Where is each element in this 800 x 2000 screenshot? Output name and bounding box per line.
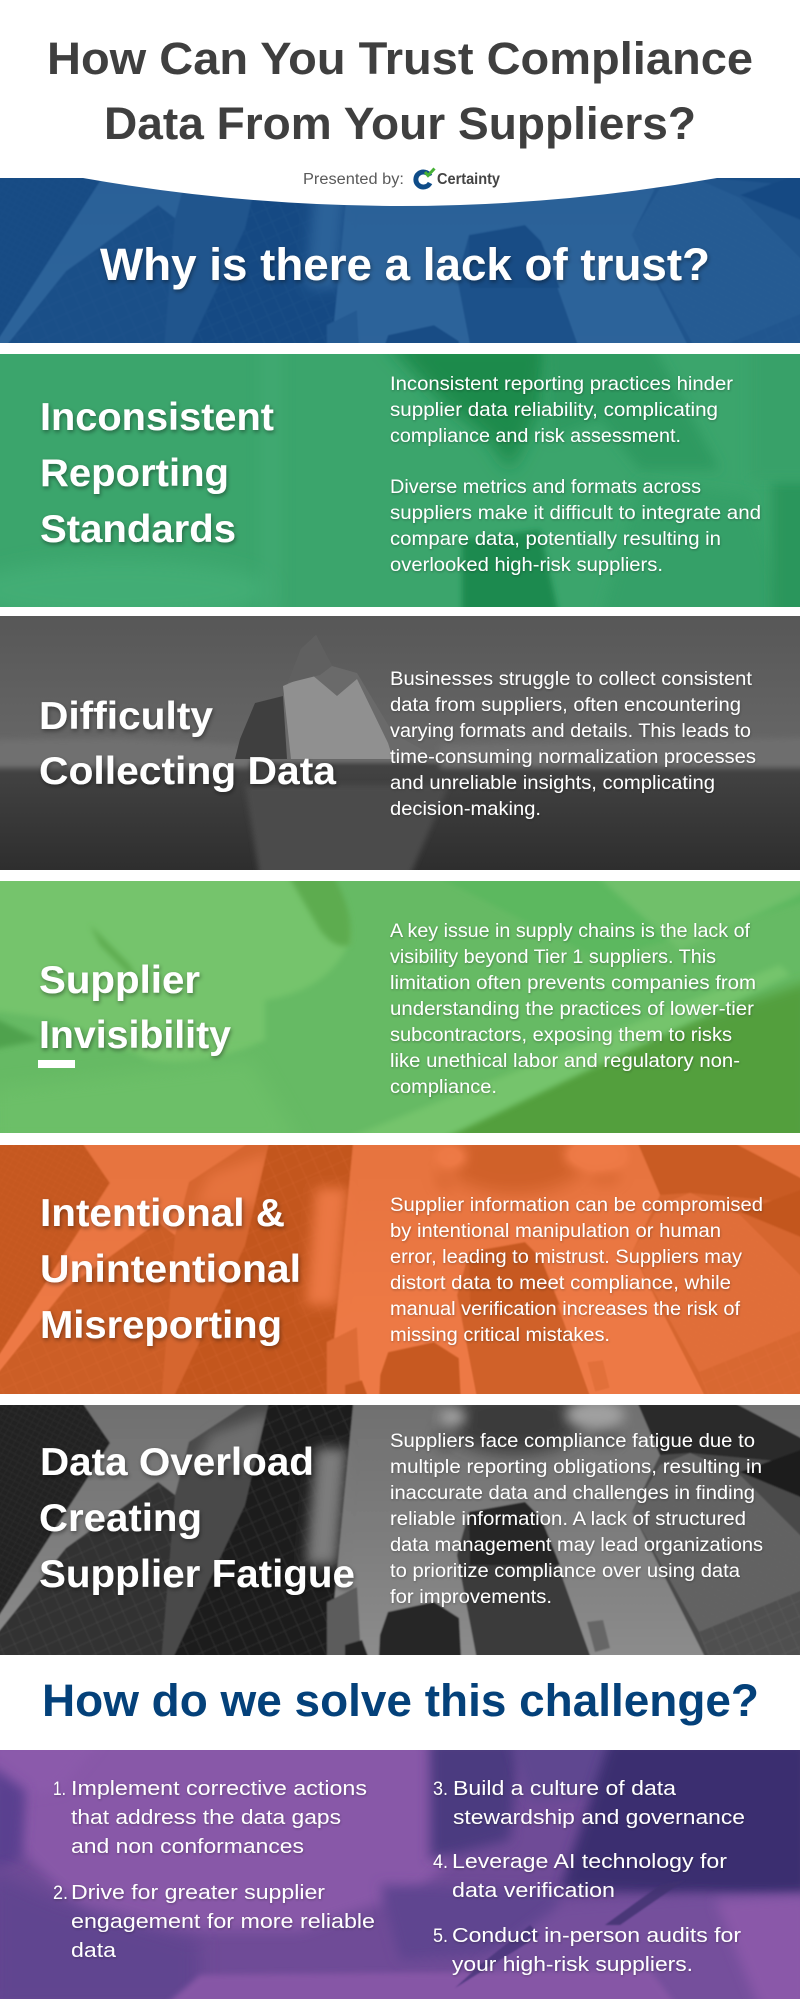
body text: compare data, potentially resulting in bbox=[390, 528, 721, 550]
list column 2: Leverage AI technology for bbox=[452, 1851, 727, 1873]
body text: A key issue in supply chains is the lack of bbox=[390, 920, 751, 942]
heading: Inconsistent bbox=[40, 396, 274, 439]
list column 2: 3. bbox=[433, 1779, 448, 1800]
grey skyscraper background bbox=[0, 1405, 800, 1655]
body text bbox=[390, 373, 761, 576]
list column 1: 2. bbox=[53, 1883, 68, 1904]
list column 1 bbox=[53, 1778, 375, 1962]
handshake photo background bbox=[0, 870, 800, 1145]
panel: solutions bbox=[0, 1740, 800, 2000]
heading bbox=[40, 1192, 301, 1347]
body text: visibility beyond Tier 1 suppliers. This bbox=[390, 946, 716, 968]
iceberg photo background bbox=[0, 616, 800, 880]
heading: Reporting bbox=[40, 452, 229, 495]
title bbox=[47, 33, 753, 149]
green photo background bbox=[0, 340, 800, 620]
body text bbox=[390, 920, 756, 1098]
body text: Diverse metrics and formats across bbox=[390, 476, 701, 498]
body text: for improvements. bbox=[390, 1586, 552, 1608]
presented by: Certainty bbox=[437, 171, 500, 188]
white accent bar bbox=[38, 1060, 75, 1068]
white curved header edge bbox=[83, 178, 717, 206]
list column 1: data bbox=[71, 1940, 117, 1962]
heading: Intentional & bbox=[40, 1192, 285, 1235]
body text: time-consuming normalization processes bbox=[390, 746, 756, 768]
heading: Supplier bbox=[39, 959, 200, 1002]
heading: Invisibility bbox=[39, 1014, 231, 1057]
body text: data from suppliers, often encountering bbox=[390, 694, 741, 716]
panel: intentional and unintentional misreporting bbox=[0, 1145, 800, 1394]
body text: Inconsistent reporting practices hinder bbox=[390, 373, 734, 395]
list column 2: your high-risk suppliers. bbox=[452, 1954, 693, 1976]
body text: distort data to meet compliance, while bbox=[390, 1272, 731, 1294]
body text: inaccurate data and challenges in finding bbox=[390, 1482, 755, 1504]
heading: how do we solve this challenge: How do we solve this challenge? bbox=[42, 1675, 759, 1726]
purple photo background bbox=[0, 1740, 800, 2000]
list column 2: 4. bbox=[433, 1852, 448, 1873]
panel: why is there a lack of trust bbox=[0, 178, 800, 343]
icon: certainty logo bbox=[416, 168, 434, 187]
heading: Unintentional bbox=[40, 1248, 301, 1291]
body text: like unethical labor and regulatory non- bbox=[390, 1050, 740, 1072]
body text: understanding the practices of lower-tier bbox=[390, 998, 755, 1020]
heading: Standards bbox=[40, 508, 236, 551]
body text: supplier data reliability, complicating bbox=[390, 399, 718, 421]
body text: and unreliable insights, complicating bbox=[390, 772, 715, 794]
heading bbox=[39, 959, 231, 1057]
heading bbox=[40, 396, 274, 551]
body text: varying formats and details. This leads to bbox=[390, 720, 751, 742]
heading: Creating bbox=[39, 1497, 202, 1540]
list column 2: Build a culture of data bbox=[453, 1778, 677, 1800]
body text: by intentional manipulation or human bbox=[390, 1220, 721, 1242]
heading: Collecting Data bbox=[39, 750, 336, 793]
body text: suppliers make it difficult to integrate and bbox=[390, 502, 761, 524]
body text: compliance and risk assessment. bbox=[390, 425, 681, 447]
list column 1: engagement for more reliable bbox=[71, 1911, 375, 1933]
body text: data management may lead organizations bbox=[390, 1534, 763, 1556]
panel: data overload creating supplier fatigue bbox=[0, 1405, 800, 1655]
body text: limitation often prevents companies from bbox=[390, 972, 756, 994]
list column 1: that address the data gaps bbox=[71, 1807, 341, 1829]
body text: subcontractors, exposing them to risks bbox=[390, 1024, 732, 1046]
list column 2: stewardship and governance bbox=[453, 1807, 745, 1829]
list column 1: 1. bbox=[53, 1779, 66, 1800]
heading: Data Overload bbox=[40, 1441, 314, 1484]
heading bbox=[39, 695, 336, 793]
body text: multiple reporting obligations, resulting in bbox=[390, 1456, 762, 1478]
body text: to prioritize compliance over using data bbox=[390, 1560, 740, 1582]
heading: Supplier Fatigue bbox=[39, 1553, 355, 1596]
list column 2: data verification bbox=[452, 1880, 615, 1902]
body text: compliance. bbox=[390, 1076, 497, 1098]
heading: Why is there a lack of trust? bbox=[100, 239, 710, 290]
heading: Misreporting bbox=[40, 1304, 282, 1347]
list column 2: Conduct in-person audits for bbox=[452, 1925, 741, 1947]
list column 1: Drive for greater supplier bbox=[71, 1882, 325, 1904]
panel: supplier invisibility bbox=[0, 870, 800, 1145]
heading: Difficulty bbox=[39, 695, 213, 738]
body text: reliable information. A lack of structured bbox=[390, 1508, 746, 1530]
body text: decision-making. bbox=[390, 798, 541, 820]
list column 1: and non conformances bbox=[71, 1836, 304, 1858]
body text: manual verification increases the risk of bbox=[390, 1298, 741, 1320]
body text: missing critical mistakes. bbox=[390, 1324, 610, 1346]
blue skyscraper background bbox=[0, 178, 800, 343]
body text: overlooked high-risk suppliers. bbox=[390, 554, 663, 576]
presented by bbox=[303, 168, 500, 188]
list column 2: 5. bbox=[433, 1926, 448, 1947]
heading bbox=[39, 1441, 355, 1596]
body text: error, leading to mistrust. Suppliers may bbox=[390, 1246, 742, 1268]
body text bbox=[390, 1430, 763, 1608]
title: Data From Your Suppliers? bbox=[104, 98, 696, 149]
panel: difficulty collecting data bbox=[0, 616, 800, 880]
body text bbox=[390, 668, 756, 820]
presented by: Presented by: bbox=[303, 171, 404, 188]
body text: Businesses struggle to collect consistent bbox=[390, 668, 753, 690]
body text: Suppliers face compliance fatigue due to bbox=[390, 1430, 755, 1452]
list column 1: Implement corrective actions bbox=[71, 1778, 367, 1800]
panel: inconsistent reporting standards bbox=[0, 340, 800, 620]
body text: Supplier information can be compromised bbox=[390, 1194, 763, 1216]
body text bbox=[390, 1194, 763, 1346]
orange skyscraper background bbox=[0, 1145, 800, 1394]
title: How Can You Trust Compliance bbox=[47, 33, 753, 84]
list column 2 bbox=[433, 1778, 745, 1976]
